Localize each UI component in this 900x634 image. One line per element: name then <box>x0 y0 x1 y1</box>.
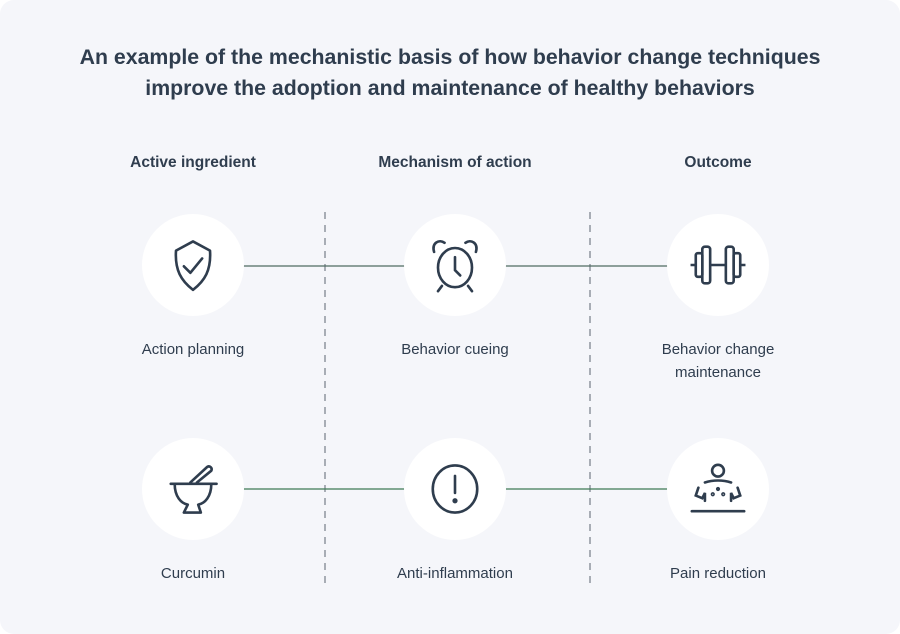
column heading: outcome: Outcome <box>684 154 752 171</box>
icon: dumbbell <box>667 214 769 316</box>
column heading: active ingredient: Active ingredient <box>130 154 256 171</box>
label: behavior change maintenance: maintenance <box>675 364 761 381</box>
icon: shield <box>142 214 244 316</box>
label: pain reduction: Pain reduction <box>670 565 766 582</box>
label: behavior change maintenance <box>662 341 774 381</box>
column heading: mechanism: Mechanism of action <box>378 154 532 171</box>
title: An example of the mechanistic basis of how behavior change techniques <box>80 45 820 69</box>
icon: exclamation <box>404 438 506 540</box>
icon: alarm clock <box>404 214 506 316</box>
label: behavior cueing: Behavior cueing <box>401 341 509 358</box>
icon: person stretching <box>667 438 769 540</box>
icon: mortar and pestle <box>142 438 244 540</box>
label: curcumin: Curcumin <box>161 565 225 582</box>
title <box>80 45 820 100</box>
label: behavior change maintenance: Behavior change <box>662 341 774 358</box>
label: anti-inflammation: Anti-inflammation <box>397 565 513 582</box>
title: improve the adoption and maintenance of healthy behaviors <box>145 76 755 100</box>
label: action planning: Action planning <box>142 341 244 358</box>
